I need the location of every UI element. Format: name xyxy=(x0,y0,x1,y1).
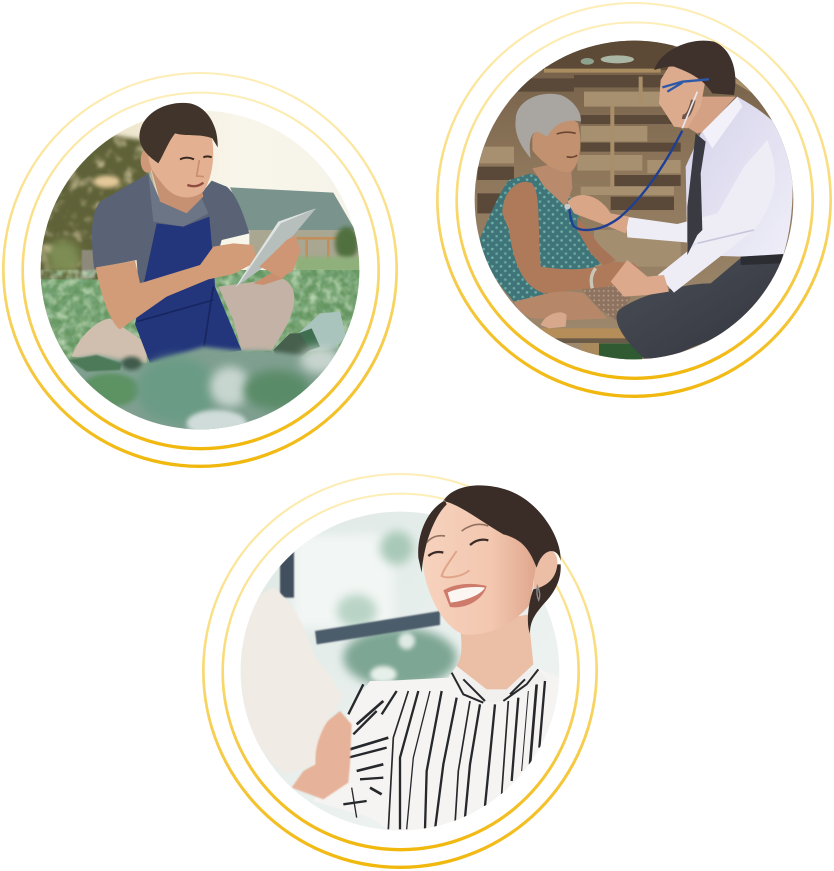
foreground: blurred cabbage xyxy=(67,347,340,437)
mouth xyxy=(187,183,203,186)
ring: outer gold xyxy=(2,72,398,468)
panel: doctor with elderly patient xyxy=(436,2,832,398)
woman: features xyxy=(557,132,577,157)
figure: doctor's head overlapping photo edge xyxy=(654,41,742,148)
collar xyxy=(450,667,536,685)
photo: field background xyxy=(33,103,367,437)
hair xyxy=(654,41,735,95)
neck xyxy=(457,614,533,689)
ear xyxy=(141,149,154,173)
woman: far arm xyxy=(577,217,616,267)
face xyxy=(423,501,537,635)
shirt xyxy=(92,173,249,283)
hair xyxy=(139,103,218,163)
nose xyxy=(197,160,204,177)
tablet xyxy=(235,208,316,287)
apron xyxy=(135,217,242,363)
woman: foot xyxy=(541,312,567,328)
white sleeve xyxy=(240,588,343,774)
hair xyxy=(418,485,561,634)
woman: skirt xyxy=(581,285,631,320)
collar xyxy=(702,97,742,148)
stethoscope earpiece xyxy=(682,92,697,128)
woman: neck and chest xyxy=(532,165,572,206)
face xyxy=(148,131,213,197)
neck xyxy=(152,170,203,213)
ear xyxy=(533,550,557,589)
eyes xyxy=(428,540,488,556)
doctor: trousers xyxy=(616,255,782,358)
figure: farmer xyxy=(72,103,316,363)
face xyxy=(659,63,707,128)
woman: arm xyxy=(502,182,641,293)
fingers xyxy=(259,235,301,278)
panel: farmer with tablet xyxy=(2,72,398,468)
window frame xyxy=(315,611,440,644)
woven wall xyxy=(467,33,801,367)
photo: consultation scene xyxy=(467,33,801,367)
handshake hand xyxy=(292,711,352,799)
woman: bracelet xyxy=(591,268,596,288)
back hand wrist xyxy=(253,270,283,285)
ring: inner gold xyxy=(455,21,814,380)
woman: hair xyxy=(515,94,581,158)
woman: lower leg xyxy=(514,291,607,320)
pile of cabbage leaf right xyxy=(298,312,346,352)
doctor: shirt xyxy=(686,97,793,257)
photo: handshake scene xyxy=(233,504,567,838)
office backdrop xyxy=(233,504,567,838)
neck xyxy=(681,97,736,133)
earring xyxy=(537,586,540,600)
brows xyxy=(427,524,488,543)
doctor: forearm and hand xyxy=(567,195,629,233)
figure: woman's head overlapping rings xyxy=(418,485,561,635)
arm xyxy=(96,243,257,329)
stethoscope xyxy=(569,131,682,230)
woman: dress xyxy=(480,173,601,302)
beard xyxy=(682,100,693,117)
panel: smiling woman handshake xyxy=(202,473,598,869)
eyes xyxy=(180,156,212,159)
blouse stripes xyxy=(343,681,545,829)
woman: face xyxy=(532,118,580,172)
ring: inner gold xyxy=(221,493,580,851)
nose xyxy=(442,551,469,577)
ring: inner gold xyxy=(21,92,380,450)
glasses xyxy=(662,79,709,92)
doctor: sleeve xyxy=(626,140,775,293)
ring: outer gold xyxy=(202,473,598,869)
blouse xyxy=(313,666,560,831)
trousers xyxy=(72,318,147,363)
mouth xyxy=(443,584,487,607)
bench xyxy=(537,328,714,340)
doctor: tie xyxy=(687,133,706,255)
collar xyxy=(148,173,208,227)
doctor: belt xyxy=(741,254,783,265)
ring: outer gold xyxy=(436,2,832,398)
